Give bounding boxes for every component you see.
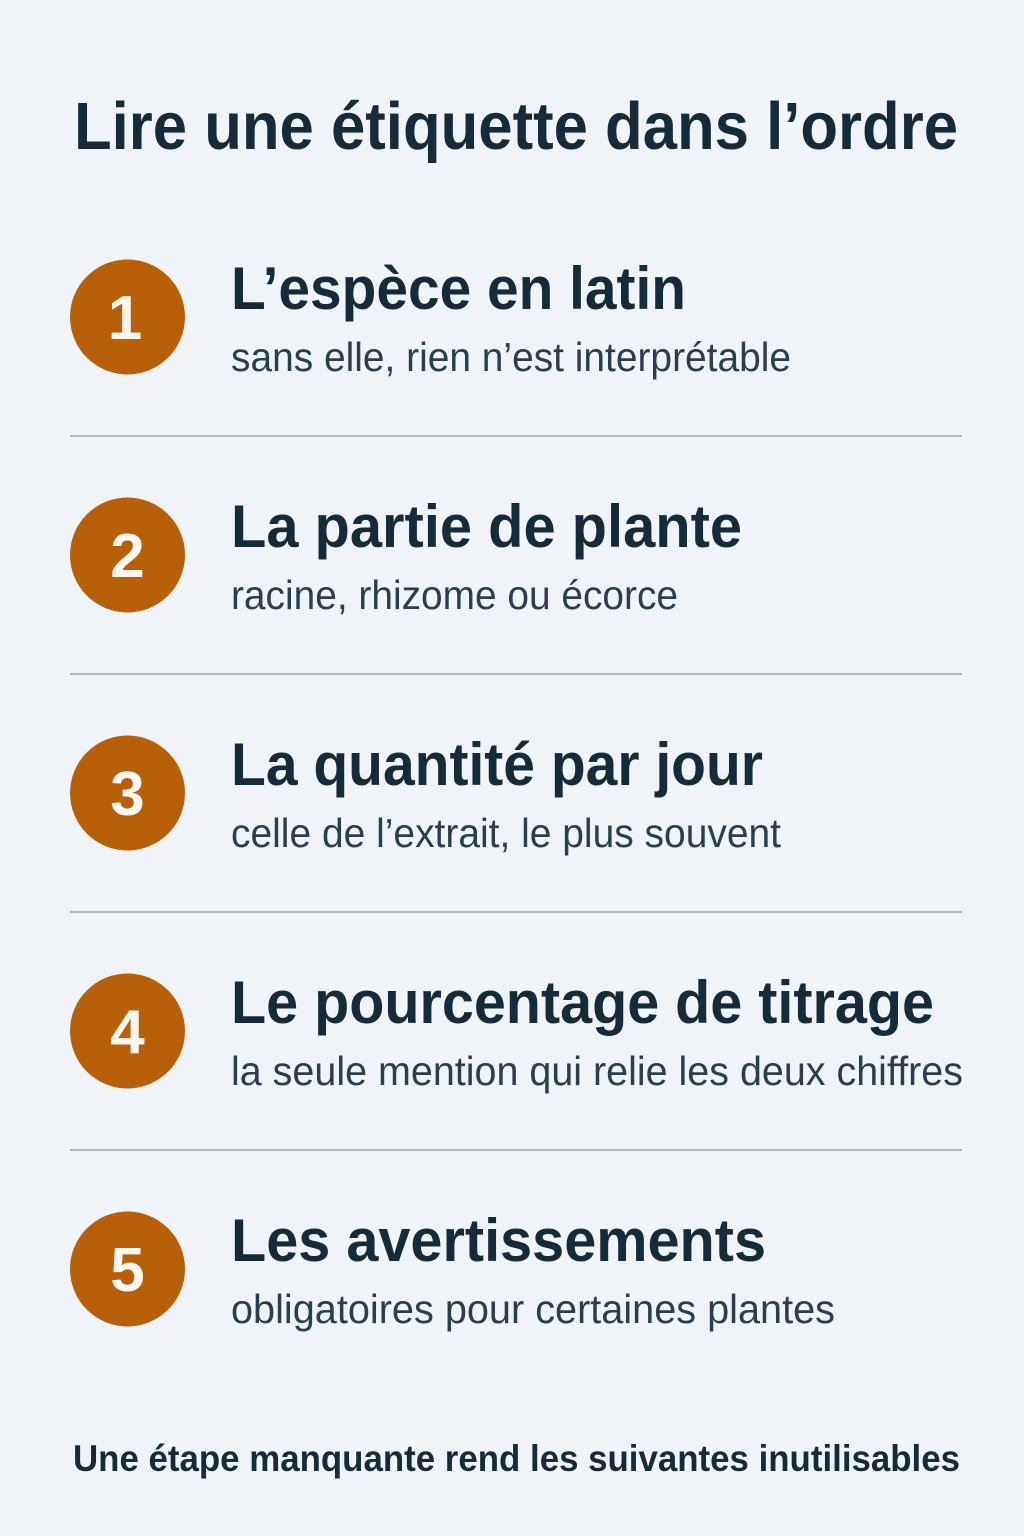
footer note: Une étape manquante rend les suivantes inutilisables	[73, 1438, 960, 1479]
icon: number badge 3	[70, 736, 185, 850]
title: Lire une étiquette dans l’ordre	[74, 89, 958, 164]
step 5 description: obligatoires pour certaines plantes	[231, 1286, 835, 1332]
icon: number badge 4	[70, 974, 185, 1088]
step 3	[70, 731, 782, 856]
step 3 description: celle de l’extrait, le plus souvent	[231, 810, 782, 856]
icon: number badge 1	[70, 260, 185, 374]
icon: number badge 3: 3	[110, 760, 145, 829]
icon: number badge 4: 4	[110, 998, 145, 1067]
step 1 heading: L’espèce en latin	[231, 255, 686, 322]
step 5 heading: Les avertissements	[231, 1207, 766, 1274]
icon: number badge 2	[70, 498, 185, 612]
step 1	[70, 255, 791, 380]
step 3 heading: La quantité par jour	[231, 731, 763, 798]
step 2 heading: La partie de plante	[231, 493, 742, 560]
icon: number badge 5	[70, 1212, 185, 1326]
icon: number badge 2: 2	[110, 522, 145, 591]
step 5	[70, 1207, 835, 1332]
step 1 description: sans elle, rien n’est interprétable	[231, 334, 791, 380]
icon: number badge 1: 1	[108, 284, 142, 353]
step 2	[70, 493, 742, 618]
step 2 description: racine, rhizome ou écorce	[231, 572, 678, 618]
icon: number badge 5: 5	[110, 1236, 145, 1305]
step 4 heading: Le pourcentage de titrage	[231, 969, 934, 1036]
step 4	[70, 969, 963, 1094]
step 4 description: la seule mention qui relie les deux chiffres	[231, 1048, 963, 1094]
